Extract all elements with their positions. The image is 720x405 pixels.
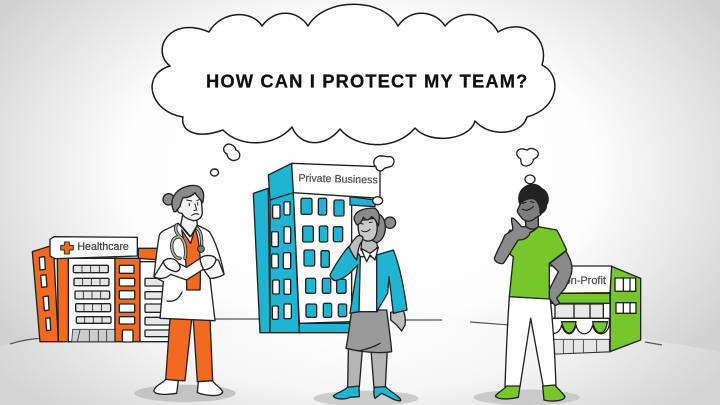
head bbox=[517, 199, 542, 221]
left shoe bbox=[495, 386, 520, 399]
left hand bbox=[163, 259, 180, 272]
thought bubble bbox=[374, 156, 394, 171]
legs bbox=[348, 348, 387, 388]
side windows bbox=[39, 257, 51, 331]
character: woman bbox=[313, 310, 419, 405]
green side wall bbox=[610, 266, 641, 352]
sign board bbox=[50, 237, 137, 259]
thought cloud: man bbox=[517, 149, 538, 184]
bubble small bbox=[525, 175, 535, 184]
far arm bbox=[547, 251, 572, 306]
woman upper body bbox=[330, 208, 407, 313]
bun bbox=[384, 217, 396, 228]
awning green stripes bbox=[562, 322, 607, 333]
left side wall bbox=[32, 245, 58, 342]
hand at chin bbox=[349, 236, 363, 260]
awning bbox=[550, 318, 609, 334]
side windows bbox=[615, 278, 636, 313]
panel: non-profit building bbox=[548, 266, 641, 354]
jacket right bbox=[377, 250, 407, 313]
man upper body bbox=[494, 184, 572, 306]
front windows bbox=[301, 198, 347, 317]
shirt bbox=[500, 227, 567, 299]
face details bbox=[360, 222, 372, 232]
base strip bbox=[299, 323, 352, 333]
shop windows bbox=[555, 304, 603, 318]
skirt crease bbox=[358, 343, 380, 351]
cloud outline bbox=[152, 4, 555, 145]
orange strip bbox=[57, 257, 72, 342]
jacket left and sleeve bbox=[330, 247, 360, 313]
side window dividers bbox=[623, 278, 630, 313]
hair bbox=[519, 184, 548, 213]
right wing bbox=[140, 262, 170, 342]
face bbox=[358, 218, 377, 241]
character: man bbox=[473, 297, 580, 405]
thought cloud bbox=[152, 4, 555, 145]
window dividers bbox=[82, 265, 102, 323]
stethoscope tube bbox=[172, 225, 202, 258]
white front bbox=[68, 258, 115, 342]
neck bbox=[525, 215, 538, 229]
window rows bbox=[73, 265, 111, 323]
side block bbox=[350, 197, 375, 207]
face bbox=[178, 193, 202, 221]
sign text: Healthcare bbox=[77, 241, 129, 253]
thought bubbles: doctor bbox=[210, 144, 240, 176]
wing windows bbox=[145, 278, 172, 337]
stethoscope outline bbox=[172, 225, 202, 258]
bun bbox=[163, 194, 174, 205]
column windows bbox=[119, 265, 135, 342]
scrub top bbox=[182, 228, 200, 290]
hair bbox=[354, 208, 379, 226]
horizon line bbox=[10, 319, 662, 345]
neck bbox=[361, 237, 378, 257]
panel: healthcare building bbox=[32, 237, 172, 342]
face details bbox=[522, 202, 534, 210]
doctor upper body bbox=[154, 185, 224, 321]
doctor coat pocket bbox=[167, 292, 182, 301]
small bubble bbox=[373, 197, 383, 205]
right hand bbox=[200, 256, 216, 270]
left wall bbox=[253, 188, 270, 333]
column windows bbox=[272, 202, 291, 319]
ground floor hatch bbox=[72, 329, 115, 342]
icon: cross bbox=[61, 242, 73, 254]
lower front bbox=[553, 339, 609, 354]
cloud small bbox=[517, 149, 538, 166]
white front bbox=[293, 193, 352, 323]
sign text: Non-Profit bbox=[557, 275, 606, 287]
skirt bbox=[346, 310, 392, 353]
coat bbox=[154, 223, 224, 321]
neck bbox=[181, 215, 197, 237]
right shoe bbox=[374, 387, 401, 401]
stethoscope chest piece bbox=[198, 246, 204, 252]
shadow bbox=[134, 385, 236, 402]
face details bbox=[187, 199, 200, 215]
shop front bbox=[550, 293, 610, 354]
sign text: Private Business bbox=[298, 172, 378, 186]
hair bbox=[172, 185, 204, 212]
wing top strip bbox=[138, 248, 160, 260]
character: doctor bbox=[134, 290, 236, 402]
shadow bbox=[473, 390, 580, 405]
back hair bbox=[372, 213, 385, 243]
right shoe bbox=[543, 385, 565, 401]
blouse bbox=[358, 257, 378, 312]
trousers bbox=[505, 297, 556, 387]
panel: private business building bbox=[253, 156, 394, 333]
column bbox=[270, 193, 299, 333]
ground bbox=[0, 319, 720, 405]
shadow bbox=[313, 391, 419, 405]
crossed arms bbox=[154, 258, 224, 280]
near arm bbox=[494, 218, 537, 264]
left shoe bbox=[333, 386, 359, 399]
sign board bbox=[292, 163, 380, 198]
sign bbox=[548, 266, 612, 293]
orange column bbox=[115, 258, 140, 342]
upper section bbox=[268, 163, 294, 200]
collar bbox=[361, 247, 378, 262]
cloud title: HOW CAN I PROTECT MY TEAM? bbox=[206, 72, 528, 91]
trousers bbox=[166, 290, 213, 382]
shop green band bbox=[550, 293, 610, 303]
shoes bbox=[154, 379, 178, 394]
right hand bbox=[391, 310, 405, 331]
